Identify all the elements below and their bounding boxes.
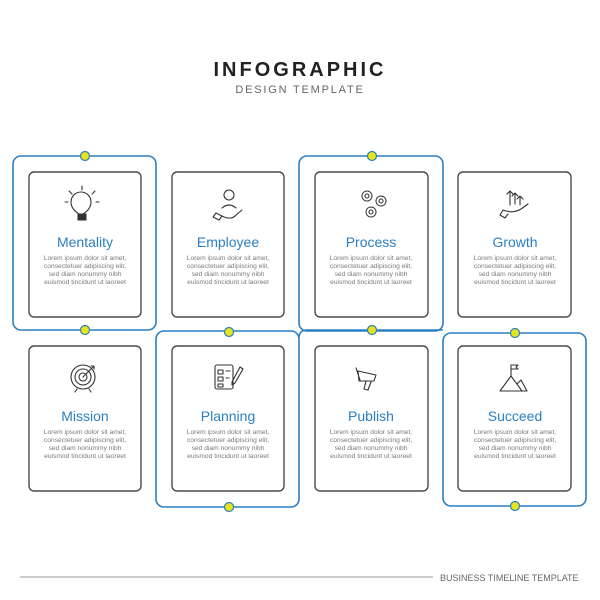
panel: Employee: euismod tincidunt ut laoreet (187, 279, 269, 286)
panel: Process: consectetuer adipiscing elit, (330, 263, 412, 270)
panel: Employee: Employee (197, 234, 259, 250)
panel: Succeed (458, 346, 571, 491)
panel: Mission: consectetuer adipiscing elit, (44, 437, 126, 444)
panel: Publish (315, 346, 428, 491)
panel: Succeed: Lorem ipsum dolor sit amet, (474, 429, 556, 436)
icon: mountain flag (500, 365, 527, 391)
panel: Employee: sed diam nonummy nibh (192, 271, 265, 278)
panel: Planning: Lorem ipsum dolor sit amet, (187, 429, 269, 436)
panel: Mentality: euismod tincidunt ut laoreet (44, 279, 126, 286)
panel: Planning: consectetuer adipiscing elit, (187, 437, 269, 444)
panel: Growth: Lorem ipsum dolor sit amet, (474, 255, 556, 262)
panel: Process: Process (346, 234, 396, 250)
panel: Growth: Growth (492, 234, 538, 250)
panel: Mission (29, 346, 141, 491)
footer: BUSINESS TIMELINE TEMPLATE (440, 573, 579, 583)
panel: Mentality: sed diam nonummy nibh (49, 271, 122, 278)
panel: Process (315, 172, 428, 317)
panel: Publish: consectetuer adipiscing elit, (330, 437, 412, 444)
icon: gears (362, 191, 386, 217)
panel: Mentality: consectetuer adipiscing elit, (44, 263, 126, 270)
panel: Employee: Lorem ipsum dolor sit amet, (187, 255, 269, 262)
panel: Planning (172, 346, 284, 491)
panel: Mission: sed diam nonummy nibh (49, 445, 122, 452)
panel: Mentality: Mentality (57, 234, 113, 250)
panel: Succeed: euismod tincidunt ut laoreet (474, 453, 556, 460)
panel: Employee: consectetuer adipiscing elit, (187, 263, 269, 270)
panel: Publish: euismod tincidunt ut laoreet (330, 453, 412, 460)
panel: Publish: Publish (348, 408, 394, 424)
panel: Process: Lorem ipsum dolor sit amet, (330, 255, 412, 262)
panel: Planning: euismod tincidunt ut laoreet (187, 453, 269, 460)
panel: Succeed: consectetuer adipiscing elit, (474, 437, 556, 444)
icon: hand with person (213, 190, 242, 220)
panel: Growth: consectetuer adipiscing elit, (474, 263, 556, 270)
panel: Succeed: sed diam nonummy nibh (479, 445, 552, 452)
timeline dots (80, 152, 520, 512)
panel: Growth (458, 172, 571, 317)
title: DESIGN TEMPLATE (235, 84, 365, 96)
panel: Employee (172, 172, 284, 317)
panel: Mission: Mission (61, 408, 109, 424)
panel: Growth: sed diam nonummy nibh (479, 271, 552, 278)
panel: Planning: sed diam nonummy nibh (192, 445, 265, 452)
panel: Growth: euismod tincidunt ut laoreet (474, 279, 556, 286)
icon: growth arrows in hand (500, 191, 528, 218)
icon: megaphone (356, 368, 376, 390)
panel: Process: sed diam nonummy nibh (335, 271, 408, 278)
panel: Mission: Lorem ipsum dolor sit amet, (44, 429, 126, 436)
panel: Process: euismod tincidunt ut laoreet (330, 279, 412, 286)
panel: Mentality: Lorem ipsum dolor sit amet, (44, 255, 126, 262)
panel: Publish: Lorem ipsum dolor sit amet, (330, 429, 412, 436)
panel: Mentality (29, 172, 141, 317)
panel: Mission: euismod tincidunt ut laoreet (44, 453, 126, 460)
icon: target (71, 365, 95, 392)
panel: Succeed: Succeed (488, 408, 542, 424)
panel: Publish: sed diam nonummy nibh (335, 445, 408, 452)
panel: Planning: Planning (201, 408, 255, 424)
title: INFOGRAPHIC (214, 59, 386, 81)
icon: planning document (215, 365, 243, 389)
title (214, 59, 386, 96)
blue timeline path (13, 156, 586, 507)
icon: light bulb (65, 186, 99, 220)
